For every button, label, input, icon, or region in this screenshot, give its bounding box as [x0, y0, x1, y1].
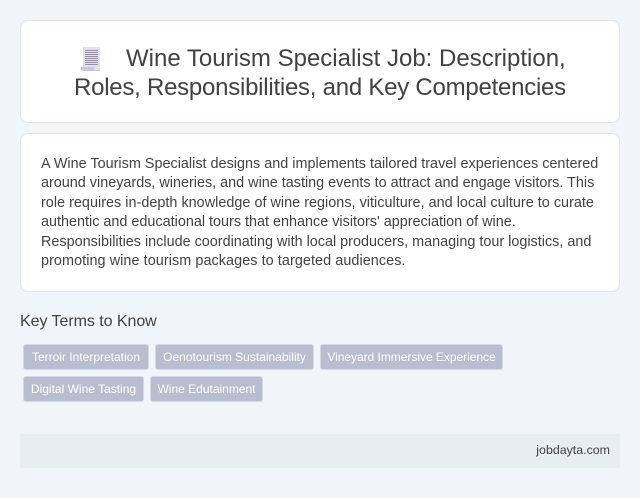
tag: Oenotourism Sustainability: Oenotourism Sustainability: [163, 350, 306, 364]
title line 1: Wine Tourism Specialist Job: Description,: [126, 45, 566, 72]
tag: Terroir Interpretation: [23, 344, 149, 370]
panel: description card: authentic and educational tours that enhance visitors' appreciation of wine.: [41, 214, 516, 230]
panel: description card: around vineyards, wineries, and wine tasting events to attract and engage visitors. This: [41, 175, 594, 191]
tag: Wine Edutainment: [150, 376, 263, 402]
footer bar: [20, 434, 620, 468]
tag: Terroir Interpretation: Terroir Interpretation: [32, 350, 140, 364]
panel: description card: A Wine Tourism Specialist designs and implements tailored travel experiences centered: [41, 156, 598, 172]
panel: description card: Responsibilities include coordinating with local producers, managing tour logistics, and: [41, 234, 591, 250]
tag: Digital Wine Tasting: [23, 376, 144, 402]
title line 2: Roles, Responsibilities, and Key Competencies: [74, 74, 566, 101]
heading: key terms: Key Terms to Know: [20, 313, 157, 330]
panel: title card: [20, 20, 620, 123]
tag: Oenotourism Sustainability: [155, 344, 314, 370]
panel: description card: [20, 133, 620, 292]
icon: document scroll: [81, 47, 100, 71]
tag: Vineyard Immersive Experience: [320, 344, 503, 370]
footer source text: jobdayta.com: [536, 443, 610, 457]
tag list: [23, 344, 503, 402]
tag: Vineyard Immersive Experience: Vineyard Immersive Experience: [327, 350, 496, 364]
tag: Digital Wine Tasting: Digital Wine Tasting: [31, 382, 136, 396]
panel: description card: role requires in-depth knowledge of wine regions, viticulture, and local culture to curate: [41, 195, 594, 211]
description text: [41, 156, 598, 269]
panel: description card: promoting wine tourism packages to targeted audiences.: [41, 253, 406, 269]
tag: Wine Edutainment: Wine Edutainment: [157, 382, 256, 396]
